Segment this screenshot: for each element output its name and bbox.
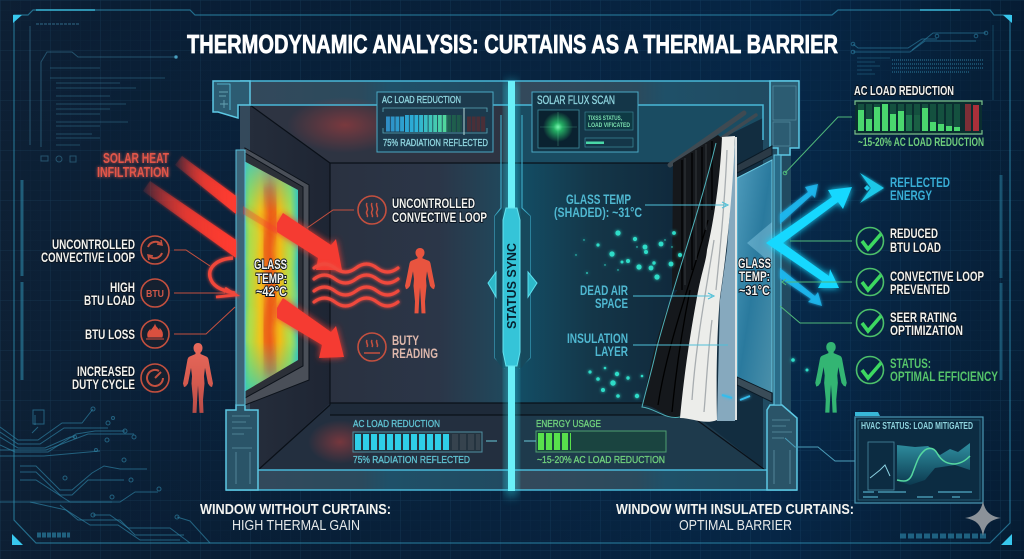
item: increased duty cycle: INCREASED [77, 363, 135, 379]
curtain layer: white liner [680, 136, 735, 422]
panel: solar flux scan: LOAD VIFICATED [588, 123, 631, 129]
item: reduced BTU load: BTU LOAD [890, 239, 941, 255]
item: BTU loss [85, 320, 169, 348]
callout: uncontrolled convective loop: CONVECTIVE LOOP [392, 209, 487, 225]
panel: solar flux scan: SOLAR FLUX SCAN [537, 95, 615, 107]
solar heat beams [143, 156, 236, 258]
leader lines: benefits [780, 117, 852, 323]
bottom label: window with insulated curtains: OPTIMAL BARRIER [679, 517, 792, 534]
item: status optimal efficiency: STATUS: [890, 355, 931, 371]
panel: AC load reduction (top): AC LOAD REDUCTION [382, 94, 461, 106]
item: high BTU load: BTU LOAD [84, 292, 135, 308]
reflected energy arrows [766, 184, 852, 306]
heading: solar heat infiltration: SOLAR HEAT [103, 150, 169, 167]
heated window without curtain [236, 148, 309, 405]
callout: uncontrolled convective loop [307, 195, 487, 228]
glass temperature: shaded: ~31°C [739, 282, 770, 298]
item: high BTU load: HIGH [110, 279, 135, 295]
progress bar: energy usage: ENERGY USAGE [536, 418, 601, 430]
icon: reflected energy: ENERGY [890, 187, 932, 203]
progress bar: energy usage [524, 418, 666, 466]
circuit traces: bottom left [0, 407, 210, 543]
label: dead air space: DEAD AIR [580, 282, 628, 298]
circuit traces: top right [851, 31, 988, 74]
bottom label: window with insulated curtains: WINDOW WITH INSULATED CURTAINS: [616, 501, 854, 518]
progress bar: AC load reduction: AC LOAD REDUCTION [353, 418, 440, 430]
convective swirl arrow [210, 258, 236, 297]
item: status optimal efficiency [856, 355, 998, 384]
item: SEER rating optimization [856, 309, 963, 338]
item: high BTU load: BTU [146, 289, 164, 300]
progress bar: AC load reduction [353, 418, 497, 466]
list: failure symptoms [41, 236, 169, 392]
heading: solar heat infiltration [97, 150, 169, 181]
item: BTU loss: BTU LOSS [85, 326, 135, 342]
callout: BUTY reading: BUTY [392, 332, 419, 348]
label: insulation layer: INSULATION [567, 330, 628, 346]
bottom label: window without curtains: HIGH THERMAL GAIN [232, 517, 360, 534]
curtain rod [670, 113, 756, 166]
label: insulation layer [567, 330, 728, 359]
corner panel: bottom left [226, 405, 258, 490]
air particles [575, 230, 808, 398]
glass temperature: hot [254, 256, 287, 299]
panel: AC load reduction (top): 75% RADIATION REFLECTED [383, 137, 488, 149]
curtain layer: black blackout [642, 135, 724, 418]
item: uncontrolled convective loop: UNCONTROLLED [52, 236, 135, 252]
center status sync pillar [488, 81, 537, 496]
center status sync pillar: STATUS SYNC [504, 242, 519, 329]
label: insulation layer: LAYER [595, 343, 628, 359]
curtain labels [554, 191, 728, 359]
heat arrows through the room [243, 206, 344, 358]
human figure: green [815, 342, 847, 413]
item: increased duty cycle [72, 363, 169, 392]
callout: uncontrolled convective loop: UNCONTROLLED [392, 195, 475, 211]
panel: AC load reduction (top) [377, 92, 493, 152]
heading: solar heat infiltration: INFILTRATION [97, 164, 169, 181]
data readout panel: top left [30, 24, 178, 162]
glass temperature: shaded: TEMP: [739, 268, 770, 284]
corner panel: bottom right [767, 405, 797, 490]
label: dead air space: SPACE [595, 295, 628, 311]
panel: HVAC status [785, 412, 983, 503]
glass temperature: hot: TEMP: [256, 270, 287, 286]
label: dead air space [580, 282, 714, 311]
panel: solar flux scan: TIXSS STATUS, [588, 116, 622, 122]
progress bar: energy usage: ~15-20% AC LOAD REDUCTION [537, 454, 665, 466]
heat waves [314, 264, 398, 306]
leader lines: left icons [174, 250, 235, 334]
insulated curtain [642, 135, 736, 422]
label: glass temp shaded: (SHADED): ~31°C [554, 204, 642, 220]
item: SEER rating optimization: OPTIMIZATION [890, 322, 963, 338]
title: THERMODYNAMIC ANALYSIS: CURTAINS AS A THERMAL BARRIER [187, 29, 838, 59]
insulation airflow ticks [722, 395, 750, 400]
panel: AC load reduction chart (right): AC LOAD REDUCTION [854, 83, 954, 98]
item: uncontrolled convective loop: CONVECTIVE LOOP [41, 249, 135, 265]
curtain layer: insulation [717, 140, 735, 421]
item: high BTU load [84, 279, 169, 308]
icon: sparkle mark [965, 501, 1001, 536]
corner panel: top right [770, 81, 799, 155]
item: convective loop prevented [856, 268, 984, 297]
item: uncontrolled convective loop [41, 236, 169, 265]
callout: BUTY reading: READING [392, 345, 438, 361]
icon: reflected energy: REFLECTED [890, 174, 950, 190]
panel: solar flux scan [532, 92, 638, 152]
glass temperature: shaded [738, 255, 771, 298]
panel: AC load reduction chart (right) [854, 83, 984, 149]
room cross-section: left half [226, 81, 511, 490]
glass temperature: hot: ~42°C [256, 283, 287, 299]
item: convective loop prevented: CONVECTIVE LOOP [890, 268, 984, 284]
icon: reflected energy [860, 173, 950, 203]
callout: BUTY reading [358, 332, 438, 361]
item: reduced BTU load: REDUCED [890, 225, 938, 241]
item: convective loop prevented: PREVENTED [890, 281, 950, 297]
item: increased duty cycle: DUTY CYCLE [72, 376, 135, 392]
label: glass temp shaded: GLASS TEMP [566, 191, 631, 207]
bottom label: window with insulated curtains [616, 501, 854, 534]
bottom label: window without curtains [200, 501, 391, 534]
human figure: left [183, 343, 213, 413]
insulated window [737, 146, 781, 405]
label: glass temp shaded [554, 191, 728, 220]
benefit checklist [856, 225, 998, 384]
bottom label: window without curtains: WINDOW WITHOUT CURTAINS: [200, 501, 391, 518]
glass temperature: shaded: GLASS [738, 255, 771, 271]
item: SEER rating optimization: SEER RATING [890, 309, 957, 325]
human figure: room [405, 248, 435, 313]
progress bar: AC load reduction: 75% RADIATION REFLECTED [353, 454, 470, 466]
corner panel: top left [213, 81, 250, 118]
room cross-section: right half [511, 81, 799, 490]
item: reduced BTU load [856, 225, 941, 255]
glass temperature: hot: GLASS [254, 256, 287, 272]
